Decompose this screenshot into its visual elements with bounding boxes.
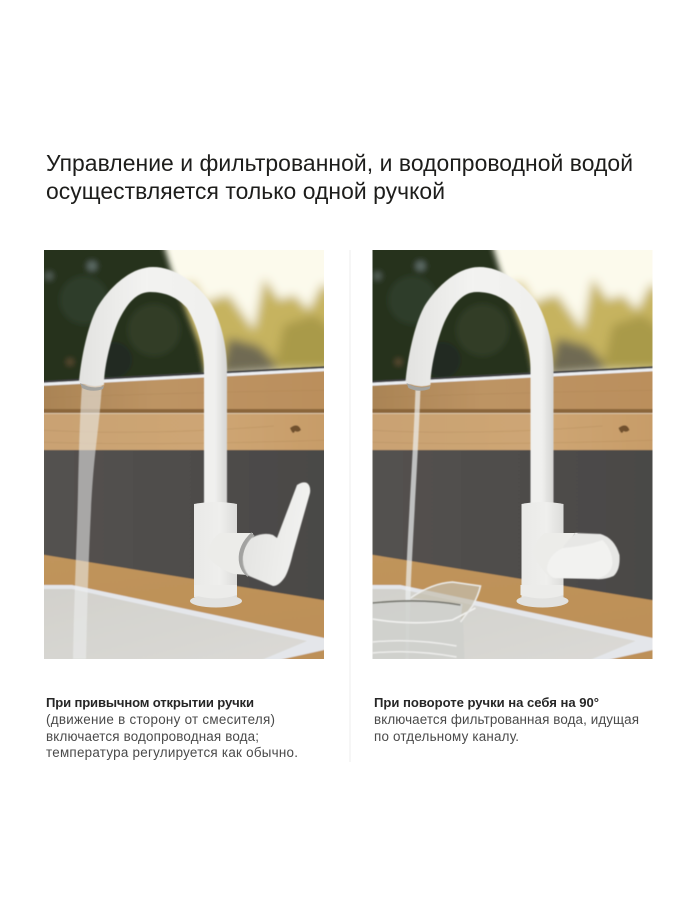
- faucet body: [522, 502, 564, 600]
- text block: left caption: (движение в сторону от смесителя): [46, 712, 275, 727]
- title: [46, 150, 633, 204]
- text block: left caption: [46, 695, 298, 760]
- handle neck: [230, 533, 253, 575]
- spout outlet: [406, 383, 430, 391]
- text block: left caption: включается водопроводная вода;: [46, 729, 259, 744]
- faucet spout: [406, 267, 554, 506]
- handle lever: [243, 482, 310, 586]
- faucet base: [516, 585, 568, 608]
- faucet base: [190, 585, 242, 608]
- text block: right caption: включается фильтрованная вода, идущая: [374, 712, 639, 727]
- glass: [372, 582, 480, 659]
- text block: right caption: При повороте ручки на себя на 90°: [374, 695, 599, 710]
- water stream: full flow: [73, 385, 102, 659]
- faucet body: [194, 502, 237, 600]
- text block: left caption: При привычном открытии ручки: [46, 695, 254, 710]
- handle grey ring: [573, 534, 575, 536]
- spout outlet: [80, 383, 104, 391]
- panel: handle turned photo: [362, 240, 662, 664]
- faucet spout: [79, 267, 227, 506]
- title: осуществляется только одной ручкой: [46, 178, 445, 204]
- title: Управление и фильтрованной, и водопроводной водой: [46, 150, 633, 176]
- handle grey ring: [241, 534, 253, 575]
- handle cap: [564, 532, 620, 580]
- handle neck: [556, 533, 578, 550]
- divider: [350, 250, 351, 762]
- panel: open handle photo: [34, 240, 334, 664]
- handle lever: [546, 540, 612, 578]
- text block: right caption: [374, 695, 639, 744]
- text block: left caption: температура регулируется как обычно.: [46, 745, 298, 760]
- water stream: thin filtered flow: [405, 390, 421, 600]
- text block: right caption: по отдельному каналу.: [374, 729, 519, 744]
